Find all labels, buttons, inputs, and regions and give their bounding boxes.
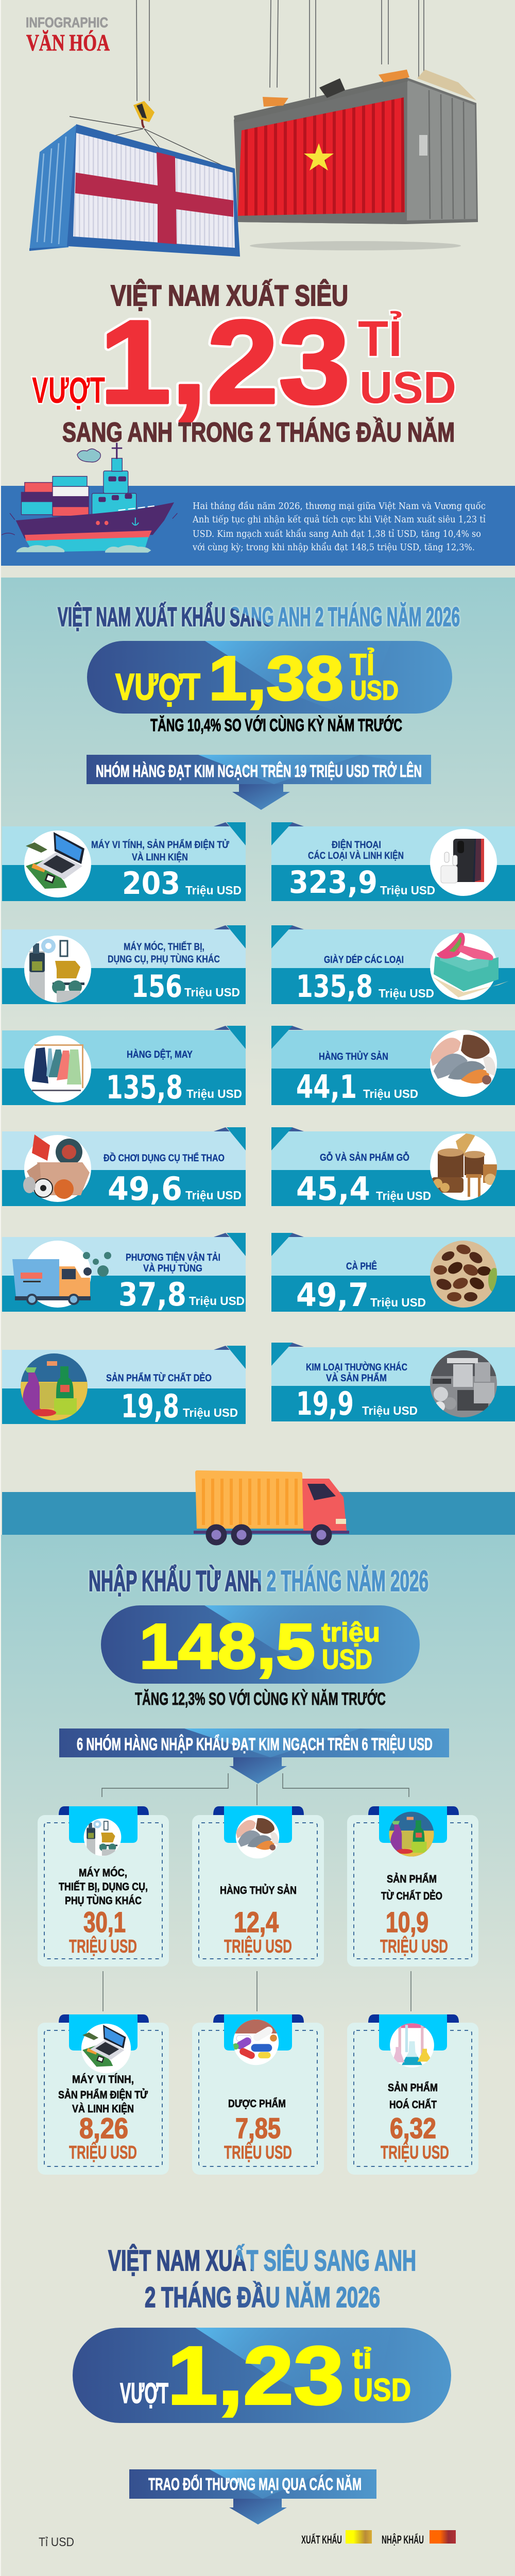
card: vehicles: VÀ PHỤ TÙNG [143,1263,202,1274]
card: import computers: 8,26 [79,2112,128,2144]
card: import seafood: TRIỆU USD [224,1935,292,1957]
pill: exports total: USD [350,675,399,706]
card: textiles: HÀNG DỆT, MAY [127,1049,193,1060]
axis unit: Tỉ USD [39,2535,74,2549]
logo: Infographic Văn Hóa [26,14,110,56]
card: phones: CÁC LOẠI VÀ LINH KIỆN [308,850,404,861]
card: textiles [2,1026,246,1106]
card: base metals: 19,9 [296,1385,354,1422]
icon [84,1819,121,1856]
icon: shoes [430,933,509,1000]
card: toys and sports: Triệu USD [185,1189,242,1202]
card: coffee [271,1233,515,1314]
card: import plastics: TỪ CHẤT DẺO [381,1890,442,1902]
card: textiles: Triệu USD [186,1087,242,1100]
card: phones: Triệu USD [380,884,435,897]
icon: metal bars [430,1350,497,1417]
card: footwear: Triệu USD [379,987,434,1000]
card: import seafood: HÀNG THỦY SẢN [220,1884,297,1896]
card: base metals [271,1343,515,1422]
heading: trade surplus [108,2244,416,2313]
section background: exports gradient [1,578,515,1093]
rigging [70,116,227,167]
card: import machinery: PHỤ TÙNG KHÁC [65,1894,142,1907]
card: base metals: Triệu USD [362,1404,418,1417]
crane hook [133,101,154,128]
icon: coffee beans [430,1241,501,1308]
card: import computers: SẢN PHẨM ĐIỆN TỬ [58,2089,148,2101]
icon: cargo truck [194,1470,349,1543]
title [32,279,456,448]
card: import computers [38,2014,169,2175]
logo: Infographic Văn Hóa: INFOGRAPHIC [26,14,108,30]
card: seafood [271,1026,515,1106]
card: import plastics [347,1806,478,1967]
card: import machinery [38,1806,169,1967]
card: import pharmaceuticals: DƯỢC PHẨM [228,2098,286,2110]
icon: machines [24,936,91,1003]
pill: trade surplus [73,2328,451,2423]
card: import computers: MÁY VI TÍNH, [72,2074,134,2086]
intro band [1,486,515,566]
pill: exports total: VƯỢT [115,667,200,708]
card: machinery: MÁY MÓC, THIẾT BỊ, [124,941,204,953]
icon: clothes [24,1036,91,1103]
unit: USD: USD [359,363,456,413]
icon [390,2023,434,2067]
container: England flag [29,124,240,257]
title line 1: VIỆT NAM XUẤT SIÊU [111,279,348,312]
unit: tỉ: TỈ [358,311,402,367]
connector lines [102,1773,411,2011]
card: phones: ĐIỆN THOẠI [332,839,381,851]
intro paragraph [192,501,486,553]
card: machinery: DỤNG CỤ, PHỤ TÙNG KHÁC [108,954,220,965]
card: machinery: 156 [131,969,182,1005]
card: footwear [271,925,515,1005]
icon: small truck [12,1241,111,1308]
shadow under containers [250,241,461,250]
intro paragraph: USD. Kim ngạch xuất khẩu sang Anh đạt 1,38 tỉ USD, tăng 10,4% so [193,529,481,539]
pill: imports total: 148,5 [139,1611,315,1682]
illustration: shipping containers on cranes [29,0,478,257]
icon [236,1815,279,1858]
pill: imports total: USD [322,1644,372,1675]
card: import plastics: 10,9 [386,1906,428,1938]
card: vehicles [2,1233,246,1313]
card: plastics: 19,8 [121,1387,179,1425]
icon: laptop [24,831,91,897]
card: vehicles: Triệu USD [189,1294,245,1308]
card: phones [271,822,515,901]
big number: 1,23 [99,296,350,428]
pill: trade surplus: tỉ [352,2342,372,2375]
star [304,143,334,171]
word: vượt: VƯỢT [32,370,105,411]
icon: seafood [430,1030,497,1097]
card: import pharmaceuticals: 7,85 [235,2112,281,2144]
pill: exports total: TỈ [350,648,374,682]
card: import pharmaceuticals [192,2014,324,2175]
card: seafood: 44,1 [296,1068,357,1106]
subtitle: exports growth: TĂNG 10,4% SO VỚI CÙNG KỲ NĂM TRƯỚC [150,716,402,735]
banner: trade over years: TRAO ĐỔI THƯƠNG MẠI QUA CÁC NĂM [148,2475,362,2494]
card: import machinery: THIẾT BỊ, DỤNG CỤ, [59,1881,148,1893]
card: import computers: VÀ LINH KIỆN [72,2103,134,2115]
chart legend: XUẤT KHẨU [301,2533,342,2546]
intro paragraph: với cùng kỳ; trong khi nhập khẩu đạt 148,5 triệu USD, tăng 12,3%. [192,543,475,553]
card: footwear: 135,8 [296,969,373,1005]
heading: trade surplus: 2 THÁNG ĐẦU NĂM 2026 [145,2281,380,2313]
icon [389,1811,434,1857]
card: plastics [2,1346,246,1425]
pill: exports total [87,641,452,721]
icon: phone [430,829,497,896]
card: coffee: Triệu USD [370,1296,426,1309]
card: computers: Triệu USD [185,884,242,897]
card: toys and sports: 49,6 [108,1170,182,1208]
card: computers: MÁY VI TÍNH, SẢN PHẨM ĐIỆN TỬ [91,839,229,851]
card: plastics: Triệu USD [183,1406,238,1419]
intro paragraph: Anh tiếp tục ghi nhận kết quả tích cực khi Việt Nam xuất siêu 1,23 tỉ [192,515,486,525]
card: import chemicals: 6,32 [390,2112,436,2144]
card: seafood: Triệu USD [363,1087,418,1100]
card: phones: 323,9 [289,865,377,901]
banner: trade over years [129,2469,376,2524]
pill: trade surplus: USD [353,2372,411,2408]
banner: import groups [59,1728,449,1784]
card: computers: 203 [122,866,180,902]
card: import seafood: 12,4 [234,1906,279,1938]
card: wood [271,1127,515,1208]
icon: cargo ship [2,443,177,553]
big number: 1,23 [99,296,350,428]
card: vehicles: PHƯƠNG TIỆN VẬN TẢI [126,1252,220,1263]
card: machinery: Triệu USD [184,986,240,999]
pill: exports total: 1,38 [209,643,344,713]
intro paragraph: Hai tháng đầu năm 2026, thương mại giữa Việt Nam và Vương quốc [193,501,486,512]
card: plastics: SẢN PHẨM TỪ CHẤT DẺO [106,1372,212,1384]
icon [81,2024,131,2073]
card: import machinery: TRIỆU USD [69,1935,137,1957]
card: base metals: VÀ SẢN PHẨM [326,1372,387,1384]
subtitle: imports growth: TĂNG 12,3% SO VỚI CÙNG KỲ NĂM TRƯỚC [135,1689,386,1709]
card: import chemicals: TRIỆU USD [381,2141,449,2163]
card: import chemicals: SẢN PHẨM [388,2082,438,2094]
card: import computers: TRIỆU USD [69,2141,137,2163]
card: seafood: HÀNG THỦY SẢN [319,1051,388,1062]
card: wood: 45,4 [296,1170,370,1208]
card: footwear: GIÀY DÉP CÁC LOẠI [324,954,404,965]
icon [232,2020,279,2065]
icon: wood [430,1133,497,1200]
card: import machinery: 30,1 [83,1906,126,1938]
pill: imports total [101,1605,420,1684]
card: import seafood [192,1806,324,1967]
banner: export groups [87,755,431,810]
chart legend: NHẬP KHẨU [382,2533,424,2546]
pill: trade surplus: 1,23 [167,2329,344,2421]
card: import plastics: TRIỆU USD [380,1935,448,1957]
card: wood: Triệu USD [376,1189,431,1202]
card: coffee: CÀ PHÊ [346,1261,377,1272]
card: import pharmaceuticals: TRIỆU USD [224,2141,292,2163]
card: toys and sports: ĐỒ CHƠI DỤNG CỤ THỂ THAO [104,1153,225,1164]
chart legend [301,2530,456,2546]
card: import chemicals [347,2014,478,2175]
card: import machinery: MÁY MÓC, [79,1867,127,1879]
icon: sports box [23,1134,91,1202]
crane cables [136,0,424,101]
section background: imports gradient [1,1535,515,2055]
card: import chemicals: HOÁ CHẤT [389,2099,437,2111]
container: Vietnam flag [234,70,478,224]
card: machinery [2,925,246,1005]
card: vehicles: 37,8 [118,1276,186,1313]
pill: imports total: triệu [321,1618,380,1648]
pill: trade surplus: VƯỢT [120,2377,168,2409]
card: computers: VÀ LINH KIỆN [132,852,188,863]
card: computers [2,822,246,902]
logo: Infographic Văn Hóa: VĂN HÓA [26,29,110,56]
card: wood: GỖ VÀ SẢN PHẨM GỖ [320,1152,409,1163]
card: textiles: 135,8 [106,1069,183,1106]
card: base metals: KIM LOẠI THƯỜNG KHÁC [306,1362,407,1373]
card: import plastics: SẢN PHẨM [387,1873,437,1885]
card: coffee: 49,7 [296,1276,369,1314]
icon: plastic products [21,1353,88,1420]
card: toys and sports [2,1127,246,1208]
band behind truck [2,1492,515,1535]
